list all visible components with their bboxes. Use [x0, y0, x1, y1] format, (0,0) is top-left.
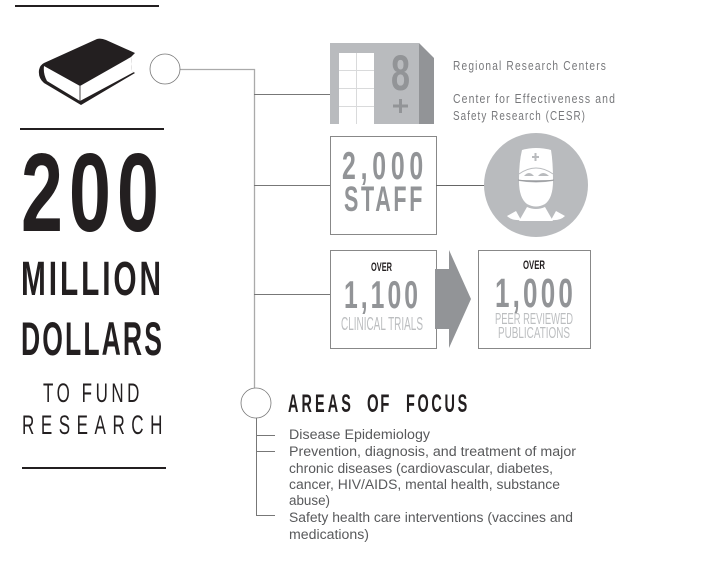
panel: clinical trials: CLINICAL TRIALS	[341, 314, 423, 334]
text: CESR: Safety Research (CESR)	[453, 108, 586, 123]
icon: building with 8+: 8	[391, 45, 410, 101]
panel: staff	[330, 136, 436, 234]
panel: publications: PEER REVIEWED	[495, 311, 573, 328]
panel: clinical trials: OVER	[371, 260, 392, 274]
heading: areas of focus	[288, 390, 470, 418]
connector lines	[180, 70, 330, 516]
icon: book	[39, 39, 135, 105]
list: areas of focus: Disease Epidemiology	[289, 427, 430, 442]
panel: publications: 1,000	[495, 270, 576, 316]
text: regional research centers: Regional Research Centers	[453, 58, 607, 73]
panel: staff: 2,000	[342, 145, 428, 188]
panel: publications: PUBLICATIONS	[498, 325, 570, 342]
list: areas of focus: cancer, HIV/AIDS, mental health, substance	[289, 477, 560, 492]
list: areas of focus: abuse)	[289, 493, 330, 508]
list: areas of focus	[289, 427, 577, 542]
panel: publications: OVER	[523, 258, 545, 272]
text: CESR: Center for Effectiveness and	[453, 91, 616, 106]
text: CESR	[453, 91, 616, 123]
list: areas of focus: medications)	[289, 527, 369, 542]
list: areas of focus: chronic diseases (cardiovascular, diabetes,	[289, 461, 553, 476]
icon: doctor	[484, 133, 588, 237]
heading: areas of focus: FOCUS	[406, 390, 470, 418]
circle: areas of focus node	[241, 388, 271, 418]
headline: dollars: DOLLARS	[21, 312, 164, 365]
panel: clinical trials	[330, 250, 436, 348]
subhead: to fund: TO FUND	[43, 378, 143, 408]
list: areas of focus: Safety health care interventions (vaccines and	[289, 510, 573, 525]
list: areas of focus: Prevention, diagnosis, and treatment of major	[289, 444, 577, 459]
headline: 200: 200	[21, 131, 165, 255]
icon: building with 8+	[330, 43, 434, 124]
heading: areas of focus: OF	[367, 390, 391, 418]
panel: clinical trials: 1,100	[344, 274, 421, 317]
panel: staff: STAFF	[344, 180, 425, 219]
arrow	[435, 250, 471, 348]
subhead: research: RESEARCH	[22, 410, 169, 440]
panel: publications	[478, 250, 590, 348]
heading: areas of focus: AREAS	[288, 390, 354, 418]
headline: million: MILLION	[21, 253, 164, 306]
circle: top node	[150, 54, 180, 84]
